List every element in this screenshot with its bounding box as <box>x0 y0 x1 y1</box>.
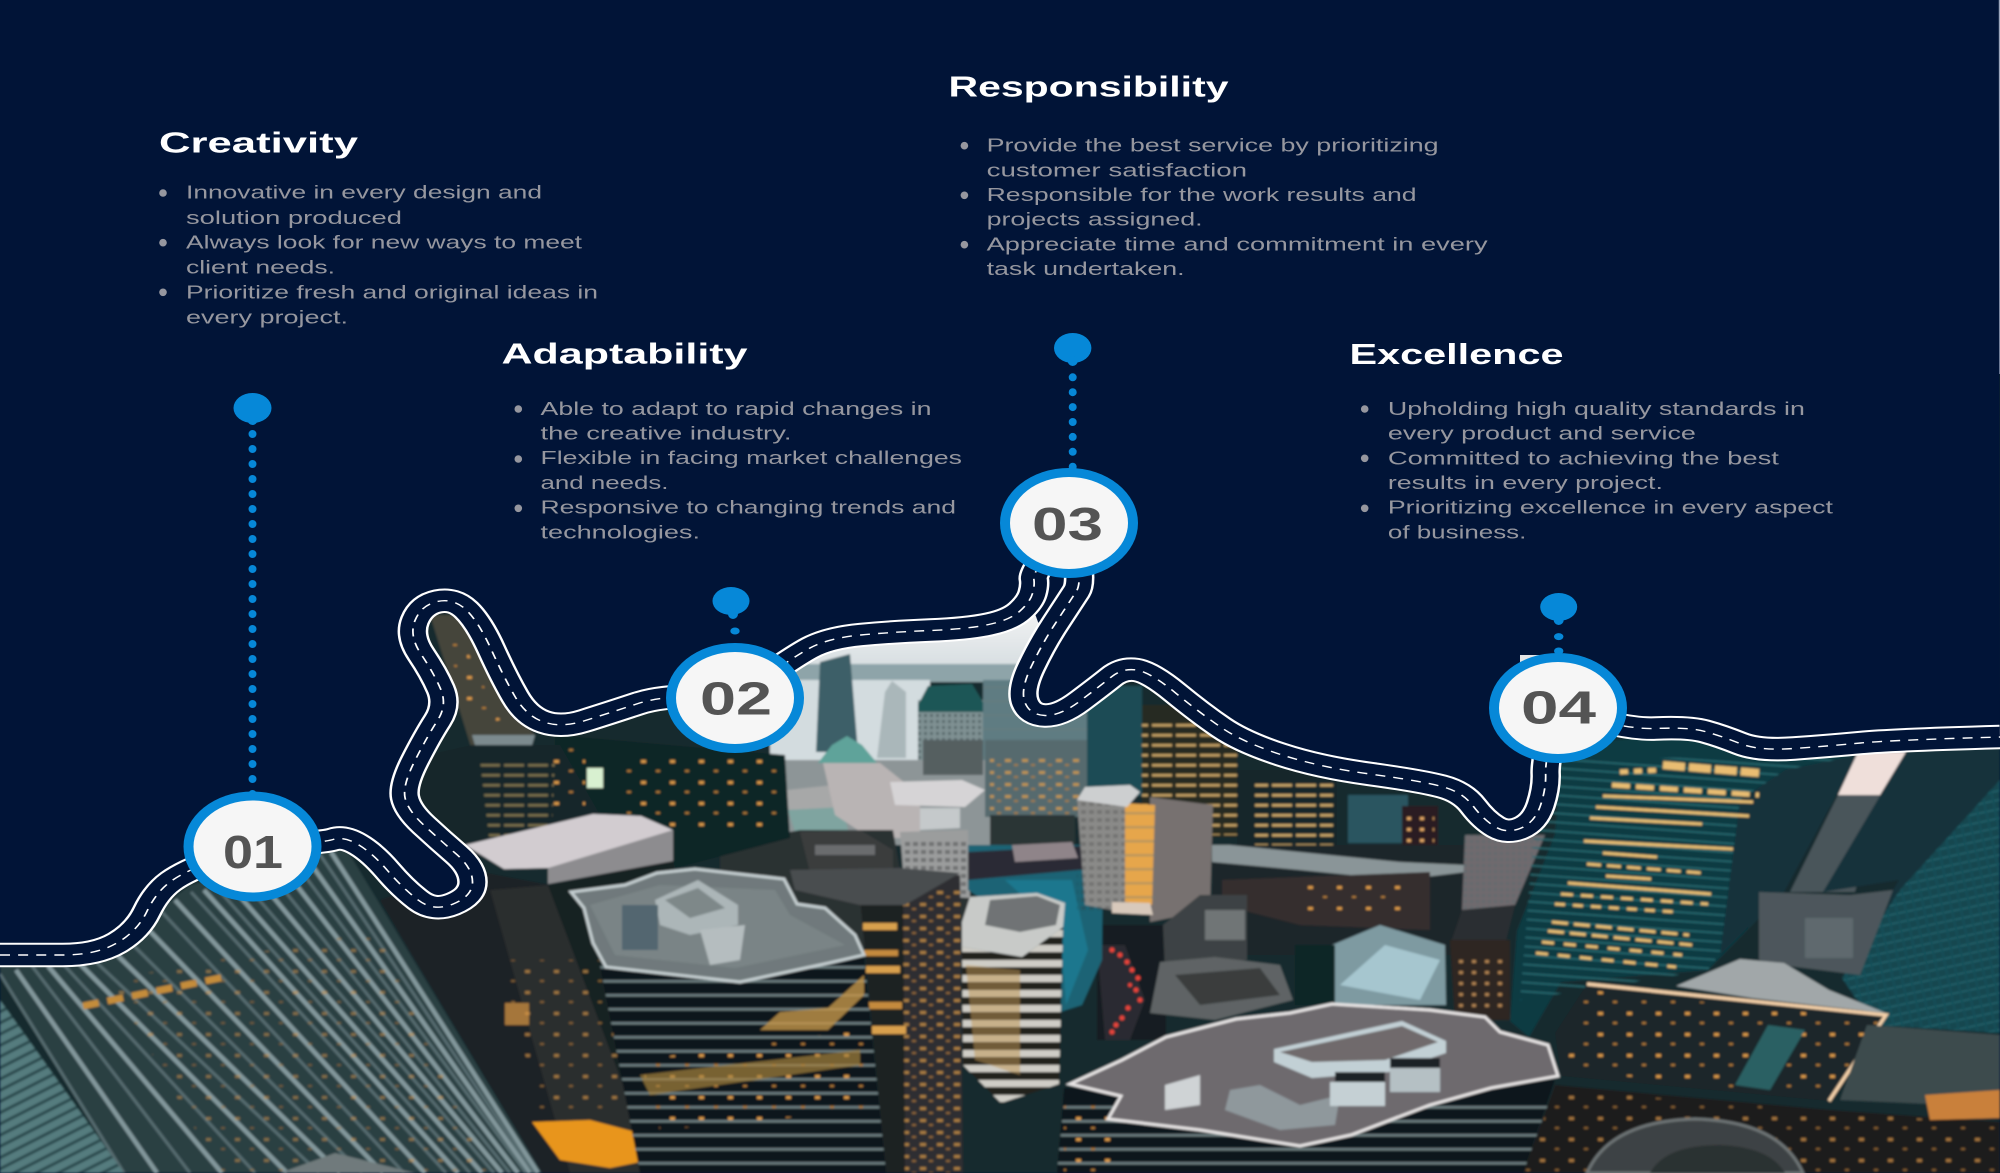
marker 02 with pin: 02 <box>700 672 772 724</box>
hazy sky and water <box>770 610 1110 765</box>
far right tower <box>1823 742 2000 1033</box>
heading: Creativity: Creativity <box>159 128 358 160</box>
grey brick tower <box>1450 835 1545 945</box>
marker 02 with pin <box>666 587 804 753</box>
bullets: Excellence: every product and service <box>1388 422 1696 443</box>
marker 04 with pin <box>1489 593 1627 763</box>
pale corner peeking behind marker 04 <box>1520 655 1542 665</box>
white striped tower <box>962 893 1065 1103</box>
orange striped tower <box>1077 785 1213 922</box>
main striped skyscraper <box>0 845 542 1173</box>
bullets: Responsibility: Provide the best service by prioritizing <box>987 135 1439 156</box>
marker 03 with pin <box>1000 333 1138 578</box>
bullets: Responsibility: Responsible for the work results and <box>987 184 1417 205</box>
front rooftop building <box>1057 1004 1558 1173</box>
low roofs beside traffic road <box>1150 925 1510 1020</box>
rooftop building centre left <box>571 869 886 1173</box>
bullets: Responsibility <box>961 135 1489 279</box>
cylinder tower <box>968 842 1103 1012</box>
dome <box>1587 1119 1803 1173</box>
bullets: Excellence <box>1361 398 1833 542</box>
lit mid buildings <box>1163 795 1468 972</box>
slender spike tower <box>430 615 535 755</box>
bullets: Adaptability: the creative industry. <box>540 422 792 443</box>
bullets: Excellence: of business. <box>1388 521 1526 542</box>
heading: Adaptability: Adaptability <box>502 338 748 370</box>
distant towers <box>816 654 1337 855</box>
bullets: Excellence: results in every project. <box>1388 472 1663 493</box>
large right tower <box>1510 735 1858 1037</box>
white-roofed tower body <box>380 814 690 1173</box>
teal corner building <box>0 1000 124 1173</box>
roof surface <box>1070 1004 1558 1146</box>
dark corner tower, centre <box>790 868 963 1173</box>
bullets: Creativity: solution produced <box>186 207 402 228</box>
winding road <box>0 523 2000 955</box>
dark low-rise band <box>720 830 970 960</box>
pale mid-distance blocks <box>784 736 1087 845</box>
bullets: Responsibility: task undertaken. <box>987 258 1185 279</box>
bullets: Responsibility: customer satisfaction <box>987 159 1247 180</box>
marker 01 with pin: 01 <box>223 826 283 878</box>
red traffic road <box>1097 925 1166 1040</box>
small roof at bottom edge <box>280 1153 415 1173</box>
bullets: Excellence: Committed to achieving the best <box>1388 447 1779 468</box>
distant orange district <box>1790 795 1880 892</box>
lit-edge office building <box>1555 959 1886 1101</box>
pin 02 <box>712 587 750 634</box>
white roof <box>465 814 673 869</box>
pin 04 <box>1540 593 1577 654</box>
dark office block behind number 02 <box>555 735 790 868</box>
bullets: Adaptability: Flexible in facing market challenges <box>540 447 962 468</box>
bullets: Adaptability: and needs. <box>540 472 668 493</box>
panel: Creativity <box>159 128 598 327</box>
heading: Responsibility: Responsibility <box>948 72 1228 104</box>
heading: Excellence: Excellence <box>1350 339 1564 371</box>
flat roof <box>571 869 864 982</box>
pin 03 <box>1054 333 1091 470</box>
bullets: Adaptability: Responsive to changing trends and <box>540 496 956 517</box>
dark tower with yellow windows <box>400 745 600 900</box>
bullets: Creativity: client needs. <box>186 256 335 277</box>
bullets: Adaptability: technologies. <box>540 521 700 542</box>
bullets: Creativity: Innovative in every design and <box>186 181 542 202</box>
pin 01 <box>234 393 272 795</box>
bullets: Excellence: Prioritizing excellence in every aspect <box>1388 496 1833 517</box>
grey low structures <box>1759 890 1893 975</box>
bullets: Excellence: Upholding high quality standards in <box>1388 398 1805 419</box>
bright sky wedge at right <box>1838 752 1906 795</box>
colonnade band under roof <box>548 830 673 884</box>
lower right plaza <box>1523 1025 2000 1173</box>
bullets: Creativity <box>159 181 598 327</box>
bullets: Responsibility: Appreciate time and commitment in every <box>987 234 1489 255</box>
panel: Adaptability <box>502 338 962 542</box>
marker 01 with pin <box>184 393 322 902</box>
marker 03 with pin: 03 <box>1032 498 1103 550</box>
bullets: Adaptability <box>514 398 962 542</box>
bullets: Creativity: Always look for new ways to meet <box>186 231 582 252</box>
orange street glow <box>532 1120 650 1168</box>
marker 04 with pin: 04 <box>1521 682 1597 734</box>
bullets: Adaptability: Able to adapt to rapid changes in <box>540 398 932 419</box>
bullets: Responsibility: projects assigned. <box>987 209 1203 230</box>
bullets: Creativity: every project. <box>186 306 348 327</box>
panel: Responsibility <box>948 72 1489 279</box>
bullets: Creativity: Prioritize fresh and original ideas in <box>186 281 598 302</box>
panel: Excellence <box>1350 339 1833 542</box>
